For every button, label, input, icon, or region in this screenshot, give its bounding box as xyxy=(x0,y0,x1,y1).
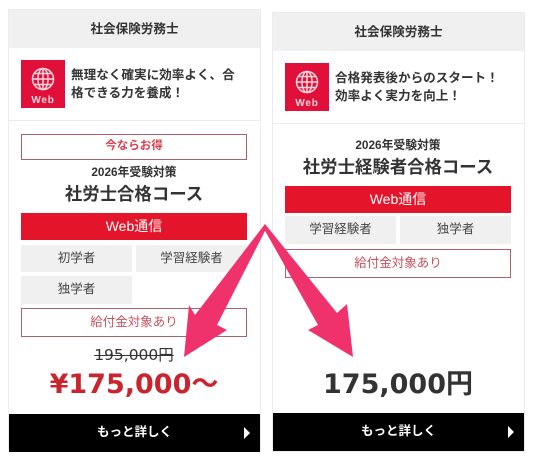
right course title: 社労士経験者合格コース xyxy=(303,157,493,177)
right tag: experienced: 学習経験者 xyxy=(309,222,372,236)
left web course bar xyxy=(21,213,247,240)
left lead text: 無理なく確実に効率よく、合 xyxy=(71,68,235,82)
right web icon xyxy=(285,63,329,111)
right tag: self-study xyxy=(400,216,511,244)
right lead text: 合格発表後からのスタート！ xyxy=(335,71,499,85)
right subsidy label: 給付金対象あり xyxy=(354,256,442,270)
arrow: pointing to right price xyxy=(263,224,353,357)
left tag: self-study xyxy=(21,276,132,304)
right web icon: Web xyxy=(295,98,319,109)
left tag: beginner: 初学者 xyxy=(58,251,95,265)
left details button: もっと詳しく xyxy=(97,425,172,439)
left subsidy label xyxy=(21,308,247,337)
left sale price: ¥175,000～ xyxy=(50,369,218,400)
right year text: 2026年受験対策 xyxy=(355,138,441,152)
left subsidy label: 給付金対象あり xyxy=(90,315,178,329)
panel: left course card xyxy=(8,9,261,452)
left year text: 2026年受験対策 xyxy=(91,165,177,179)
left tag: beginner xyxy=(21,245,132,272)
left course title: 社労士合格コース xyxy=(65,184,203,204)
arrow: pointing to left price xyxy=(184,224,267,357)
right card heading: 社会保険労務士 xyxy=(354,25,443,39)
left details button xyxy=(9,414,260,452)
right tag: self-study: 独学者 xyxy=(437,222,474,236)
right divider xyxy=(273,123,524,124)
right subsidy label xyxy=(285,249,511,278)
right lead text: 効率よく実力を向上！ xyxy=(335,89,461,103)
left tag: self-study: 独学者 xyxy=(58,282,95,296)
left discount label: 今ならお得 xyxy=(105,140,163,152)
right button arrow xyxy=(508,426,514,438)
left lead text: 格できる力を養成！ xyxy=(71,86,184,100)
right web course bar: Web通信 xyxy=(370,191,426,207)
right web course bar xyxy=(285,186,511,213)
left divider xyxy=(9,120,260,121)
left card heading: 社会保険労務士 xyxy=(90,22,179,36)
left tag: experienced: 学習経験者 xyxy=(160,251,223,265)
right price: 175,000円 xyxy=(323,369,473,400)
right details button xyxy=(273,413,524,451)
left discount label xyxy=(21,134,247,160)
left card heading xyxy=(9,10,260,48)
left web course bar: Web通信 xyxy=(106,218,162,234)
left old price: 195,000円 xyxy=(94,346,174,364)
panel: right course card xyxy=(272,12,525,452)
left web icon: Web xyxy=(31,95,55,106)
left button arrow xyxy=(244,427,250,439)
right tag: experienced xyxy=(285,216,396,244)
left lead text xyxy=(71,68,235,100)
left tag: experienced xyxy=(136,245,247,272)
right card heading xyxy=(273,13,524,51)
right lead text xyxy=(335,71,499,103)
left web icon xyxy=(21,60,65,108)
right details button: もっと詳しく xyxy=(361,424,436,438)
